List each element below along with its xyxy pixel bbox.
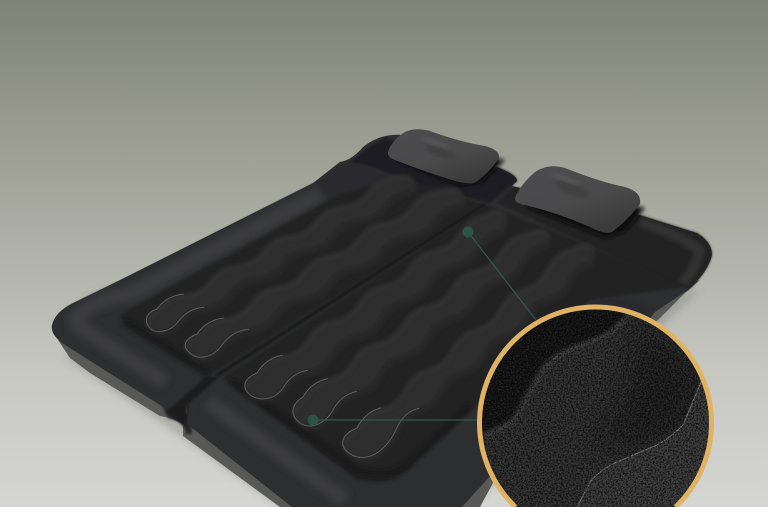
callout line: upper marker to lens [462, 226, 536, 320]
pillow left [388, 129, 505, 186]
raised fabric band [475, 303, 715, 507]
seam line [577, 380, 702, 507]
well shadow [124, 322, 470, 474]
side wall dark joint [162, 405, 192, 434]
magnified fabric lens [475, 303, 715, 507]
puffy wave tubes [146, 174, 593, 458]
marker dot [462, 226, 474, 238]
mattress [52, 135, 712, 507]
stitched loop outlines [146, 294, 419, 458]
head band right [497, 187, 712, 290]
head band left [345, 138, 517, 203]
left mat surface [121, 178, 482, 375]
lower right fabric band [577, 380, 715, 507]
section divider [216, 204, 485, 376]
dark upper groove [482, 310, 627, 435]
callout line: lower marker to lens [308, 414, 480, 426]
lower right bolster bump [560, 298, 652, 360]
pillow right [515, 166, 645, 238]
gold ring [479, 307, 712, 507]
dark right shading [606, 330, 699, 444]
side wall [58, 280, 700, 507]
fleece grain [475, 303, 715, 507]
marker dot [308, 414, 318, 426]
pillow dimple [553, 177, 591, 201]
ground shadow [60, 290, 700, 507]
left head bulge [318, 162, 405, 200]
right mat surface [222, 205, 687, 482]
corner gap between sections [168, 377, 217, 428]
right head bolster soft ridge [640, 222, 700, 285]
pillow dimple [424, 142, 458, 162]
bolster highlights [72, 194, 345, 500]
wave tube top light [148, 177, 594, 461]
groove edge light [483, 316, 627, 436]
top surface [52, 135, 712, 507]
